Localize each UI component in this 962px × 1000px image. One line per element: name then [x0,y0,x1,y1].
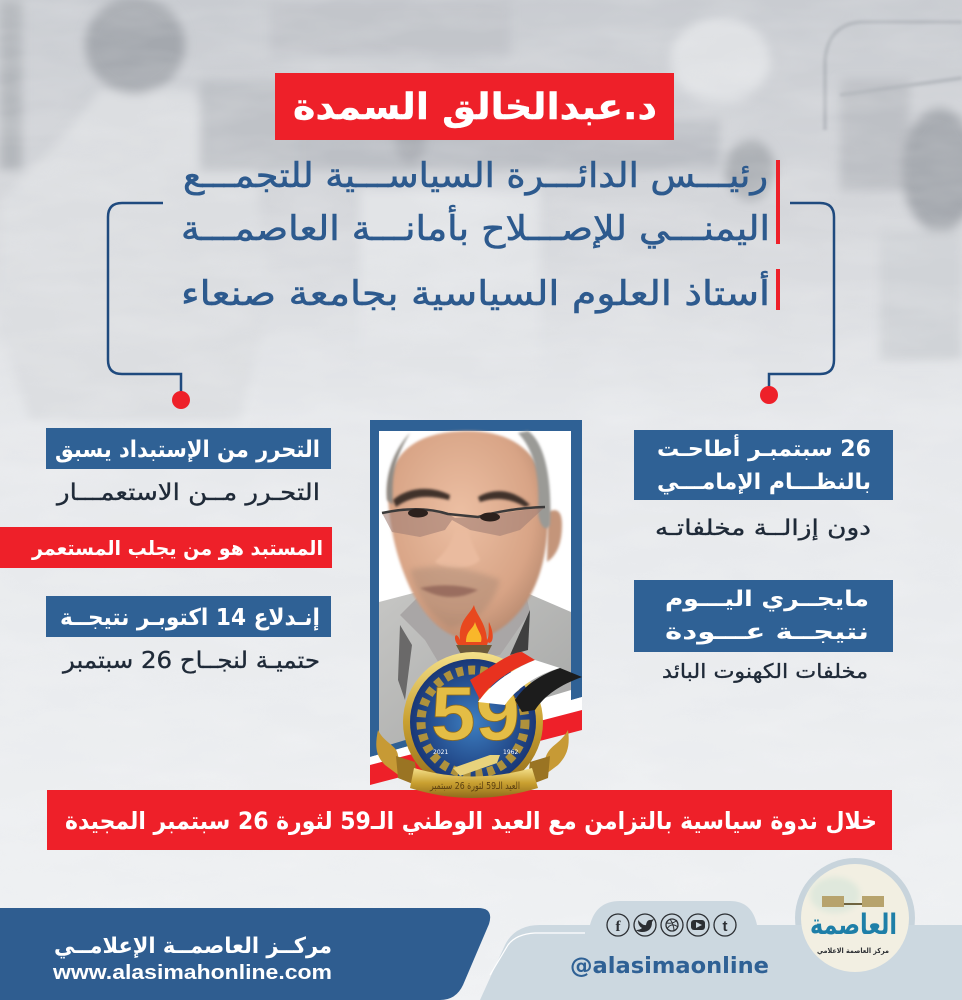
footer blue panel: مركــز العاصمــة الإعلامــي [54,934,332,959]
anniversary emblem 59: 2021 [433,749,448,756]
title banner [275,73,674,140]
left column: text block 2: حتميـة لنجــاح 26 سبتمبر [62,648,320,674]
left column: text block 1 [46,428,331,506]
bottom red banner [47,790,892,850]
portrait frame [370,420,582,785]
logo badge [801,864,909,972]
social media icons [607,914,736,936]
right column: text block 1: 26 سبتمبـر أطاحـت [657,433,871,462]
social media icons: f [616,919,622,935]
logo badge: العاصمة [810,908,897,941]
flag of Yemen [470,652,582,712]
intro text block: أستاذ العلوم السياسية بجامعة صنعاء [181,271,770,314]
left column: text block 1: التحـرر مــن الاستعمـــار [56,480,320,506]
intro text block [181,156,780,314]
right column: text block 1: دون إزالــة مخلفاتـه [655,516,871,541]
intro text block: رئيـــس الدائـــرة السياســـية للتجمـــع [183,156,768,196]
number 59: 59 [431,672,520,757]
right column: text block 2: مخلفات الكهنوت البائد [662,659,868,683]
torch [455,605,493,688]
portrait of man [379,431,571,748]
social media icons: t [722,918,728,935]
left column: text block 2 [46,596,331,674]
title banner: د.عبدالخالق السمدة [293,87,657,128]
social handle: @alasimaonline [570,954,769,979]
footer blue panel: www.alasimahonline.com [52,962,332,984]
bottom red banner: خلال ندوة سياسية بالتزامن مع العيد الوطني الـ59 لثورة 26 سبتمبر المجيدة [65,807,877,835]
footer blue panel [0,908,490,1000]
left column: red callout [0,527,332,568]
left column: text block 1: التحرر من الإستبداد يسبق [55,437,320,463]
anniversary emblem 59 [376,605,582,798]
right column: text block 2: نتيجــة عـــودة [665,620,869,645]
intro text block: اليمنـــي للإصـــلاح بأمانـــة العاصمـــة [181,205,770,249]
right column: text block 2 [634,580,893,683]
right column: text block 1 [634,430,893,541]
anniversary emblem 59: 1962 [503,749,518,756]
left column: red callout: المستبد هو من يجلب المستعمر [31,536,323,560]
left column: text block 2: إنـدلاع 14 اكتوبـر نتيجــة [60,605,320,631]
ribbon [376,730,569,798]
logo badge: مركز العاصمة الاعلامي [817,947,889,955]
bracket lines with red dots [108,203,834,409]
right column: text block 2: مايجــري اليـــوم [665,587,869,612]
footer light panel [480,858,962,1000]
ribbon: العيد الـ59 لثورة 26 سبتمبر [429,781,520,792]
right column: text block 1: بالنظـــام الإمامـــي [657,470,871,495]
